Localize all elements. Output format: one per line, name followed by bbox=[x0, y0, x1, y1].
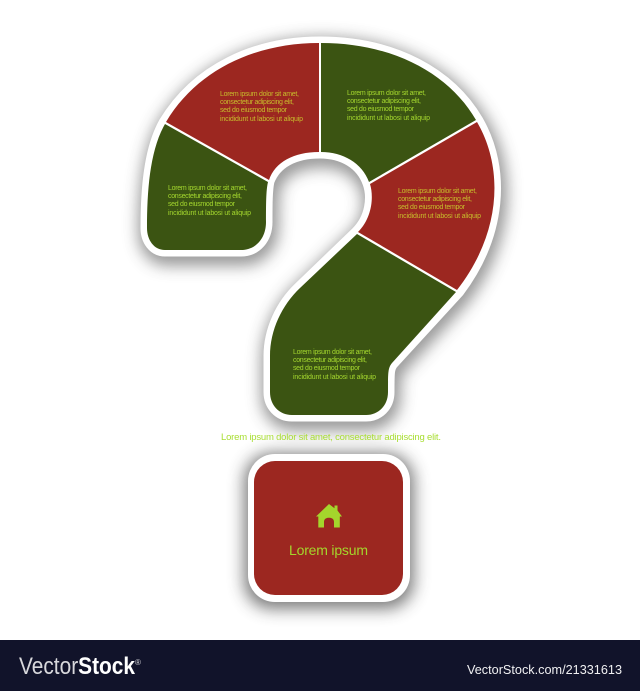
rounded square panel bbox=[244, 453, 414, 609]
segment: top right green bbox=[321, 43, 476, 182]
segment: top red: consectetur adipiscing elit, bbox=[220, 99, 294, 106]
segment: right red: consectetur adipiscing elit, bbox=[398, 196, 472, 203]
segment: bottom green: incididunt ut labosi ut aliquip bbox=[293, 374, 376, 381]
segment: right red: incididunt ut labosi ut aliquip bbox=[398, 213, 481, 220]
registered mark: ® bbox=[135, 658, 141, 667]
square red fill bbox=[254, 461, 403, 595]
question mark shape bbox=[147, 43, 497, 420]
segment: top right green: consectetur adipiscing elit, bbox=[347, 98, 421, 105]
segment: left green bbox=[147, 124, 268, 250]
segment: right red: sed do eiusmod tempor bbox=[398, 204, 466, 211]
footer url: VectorStock.com/21331613 bbox=[467, 662, 622, 677]
segment: left green: sed do eiusmod tempor bbox=[168, 201, 236, 208]
segment: top red: incididunt ut labosi ut aliquip bbox=[220, 116, 303, 123]
square shadow bbox=[244, 453, 414, 609]
icon: house bbox=[316, 504, 342, 528]
segment: top right green: Lorem ipsum dolor sit amet, bbox=[347, 90, 426, 97]
question mark white outline bbox=[147, 43, 495, 415]
segment: left green: incididunt ut labosi ut aliquip bbox=[168, 210, 251, 217]
segment: bottom green: sed do eiusmod tempor bbox=[293, 365, 361, 372]
segment: top right green: incididunt ut labosi ut aliquip bbox=[347, 115, 430, 122]
segment: left green: Lorem ipsum dolor sit amet, bbox=[168, 185, 247, 192]
segment: bottom green: consectetur adipiscing elit, bbox=[293, 357, 367, 364]
segment: bottom green bbox=[270, 234, 456, 415]
segment: top right green: sed do eiusmod tempor bbox=[347, 106, 415, 113]
question mark shadow bbox=[149, 48, 497, 420]
segment: bottom green: Lorem ipsum dolor sit amet, bbox=[293, 349, 372, 356]
segment: right red: Lorem ipsum dolor sit amet, bbox=[398, 188, 477, 195]
segment: top red: Lorem ipsum dolor sit amet, bbox=[220, 91, 299, 98]
segment: top red: sed do eiusmod tempor bbox=[220, 107, 288, 114]
segment: right red bbox=[358, 122, 494, 290]
segment: left green: consectetur adipiscing elit, bbox=[168, 193, 242, 200]
footer bar bbox=[0, 640, 640, 691]
square label: Lorem ipsum bbox=[289, 542, 368, 558]
footer logo: VectorStock bbox=[19, 653, 136, 680]
square white border bbox=[248, 454, 410, 602]
caption line: Lorem ipsum dolor sit amet, consectetur adipiscing elit. bbox=[221, 432, 441, 443]
segment: top red bbox=[166, 43, 319, 180]
